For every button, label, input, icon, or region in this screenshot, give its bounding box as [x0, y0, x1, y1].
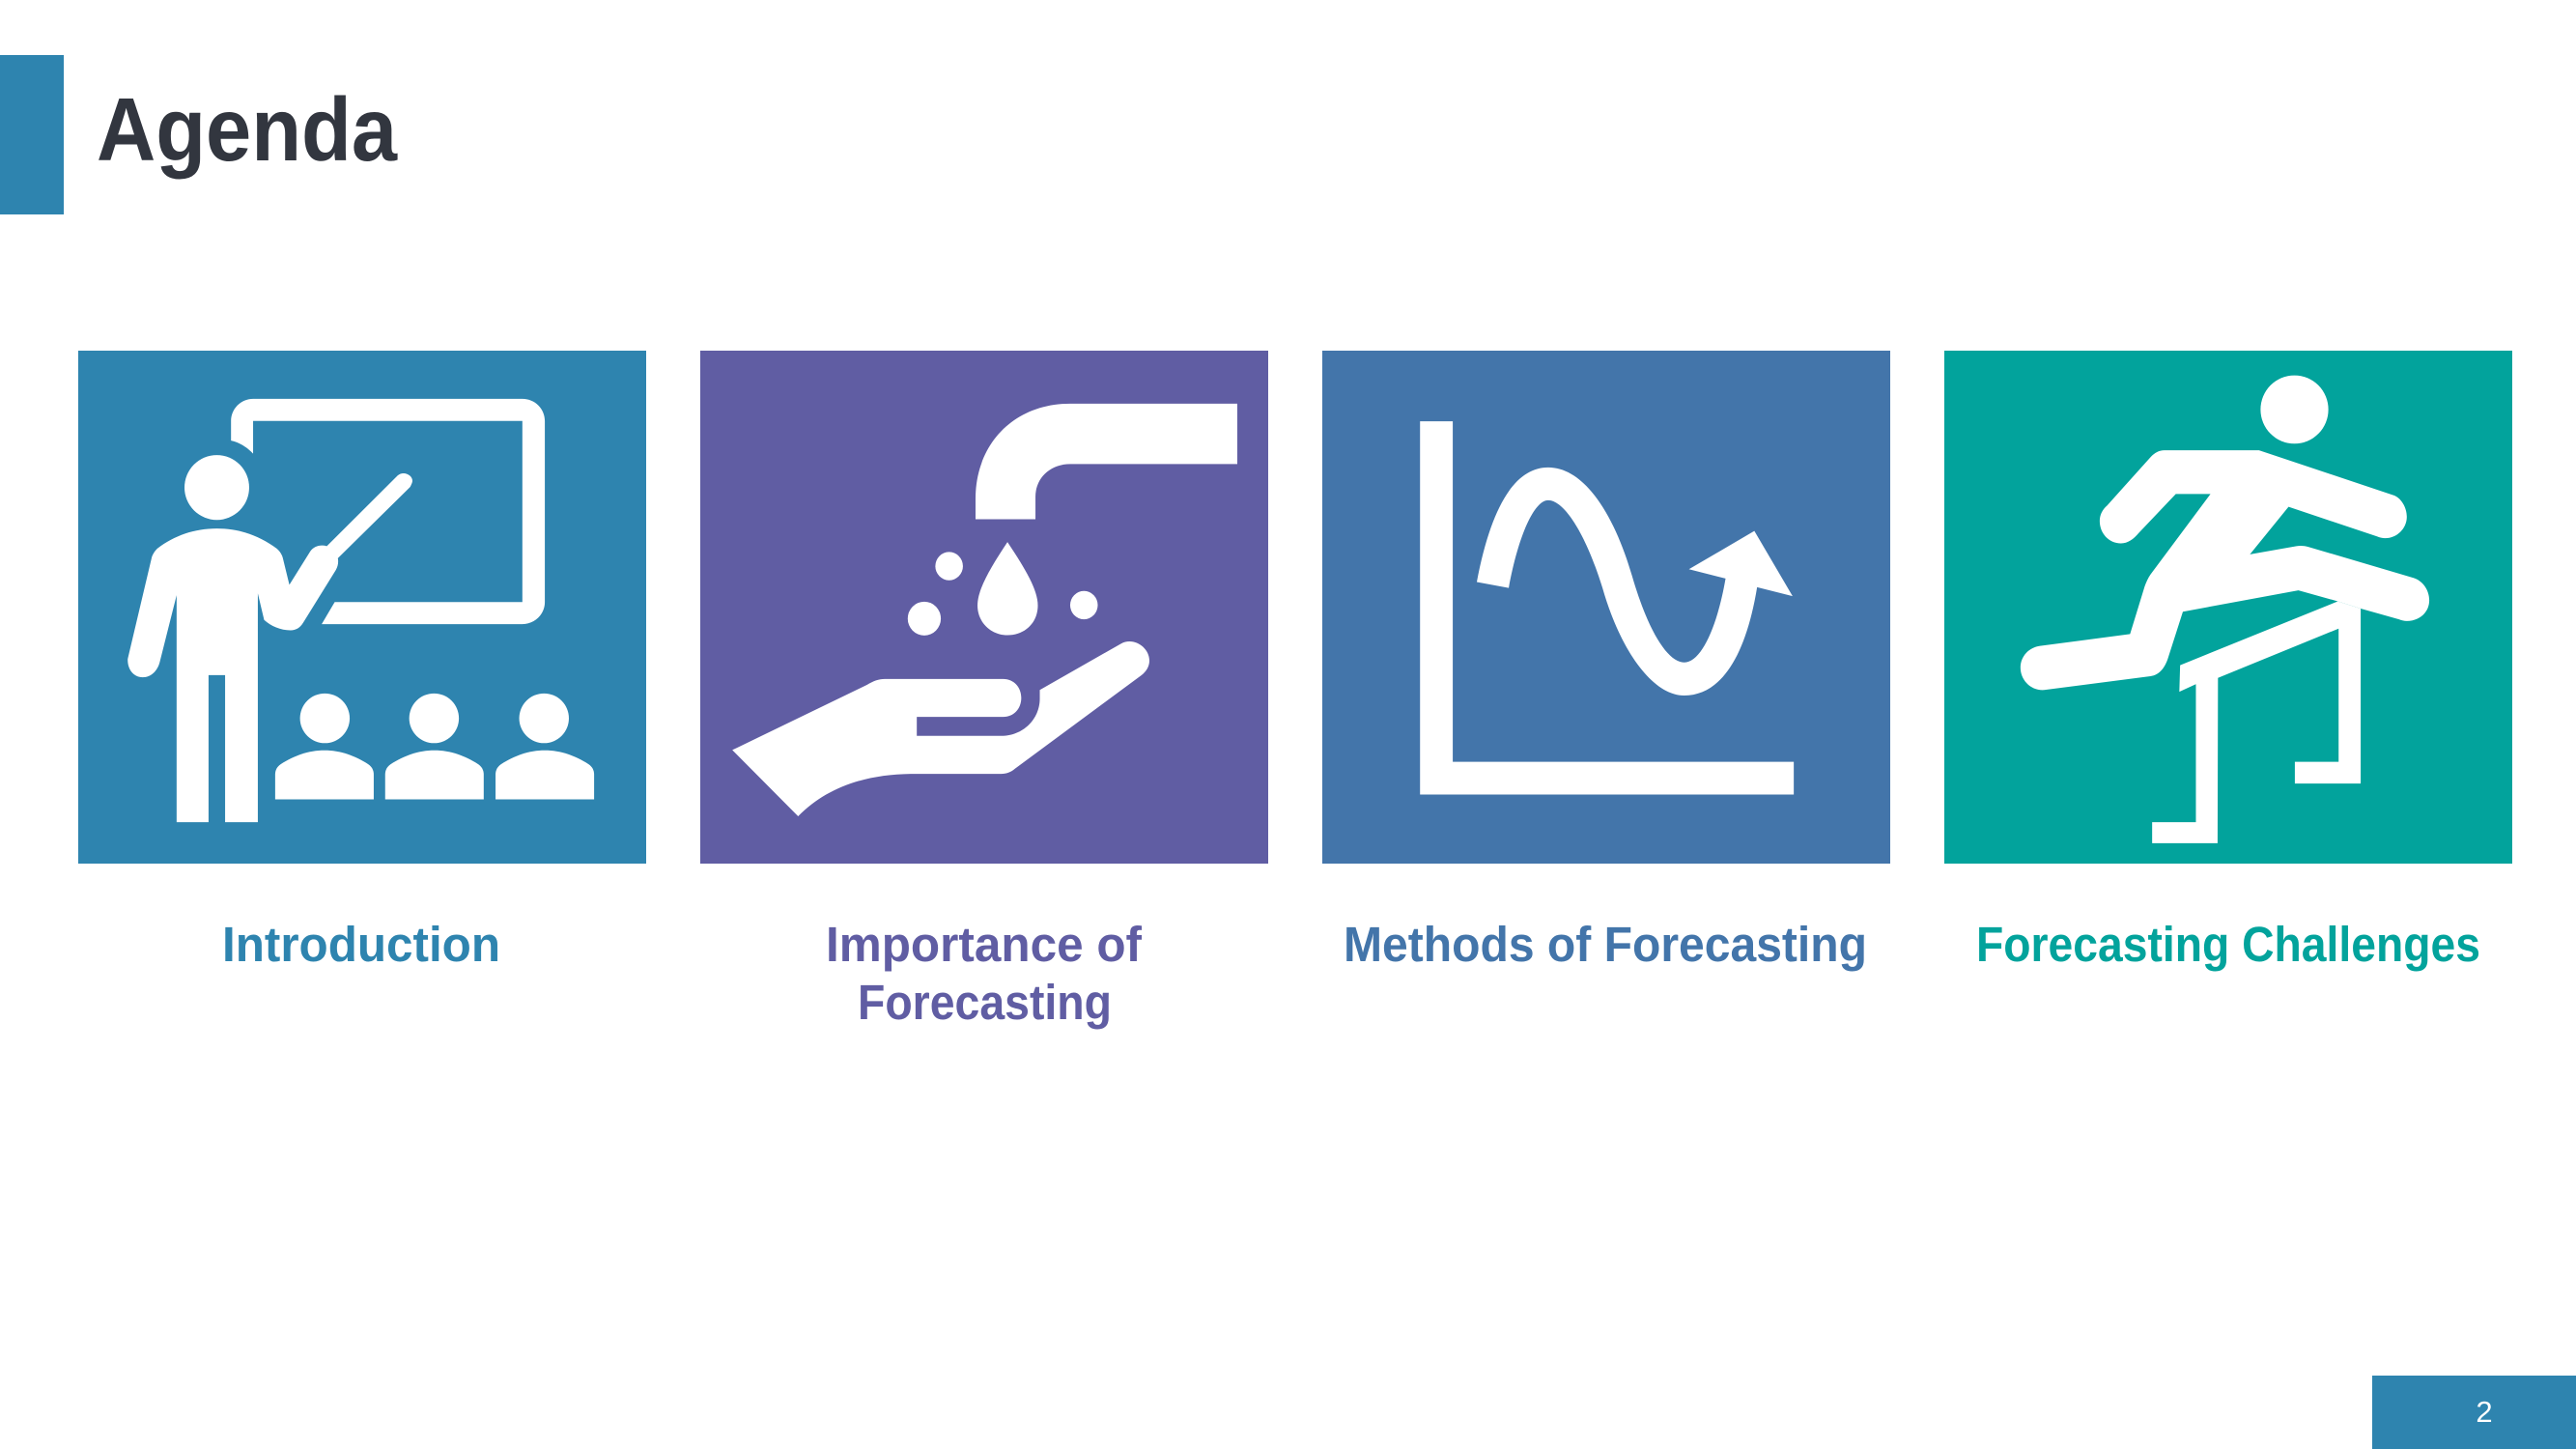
- panel: importance of forecasting: [700, 351, 1268, 1030]
- panel background: challenges: [1944, 351, 2512, 864]
- icon: chart with curved arrow: [1420, 421, 1794, 794]
- page number text: 2: [2476, 1395, 2493, 1429]
- label: forecasting challenges: Forecasting Challenges: [1976, 917, 2480, 972]
- title: Agenda: [97, 79, 398, 180]
- label: importance of forecasting: Importance of: [826, 917, 1143, 972]
- label: importance of forecasting: Forecasting: [858, 975, 1112, 1030]
- label: introduction: Introduction: [222, 917, 500, 972]
- label: importance of forecasting: [826, 917, 1143, 1030]
- icon: teacher with class: [127, 399, 594, 822]
- label: methods of forecasting: Methods of Forecasting: [1344, 917, 1867, 972]
- page number background: [2372, 1376, 2576, 1449]
- title accent bar: [0, 55, 64, 214]
- panel: methods of forecasting: [1322, 351, 1890, 972]
- panel: introduction: [78, 351, 646, 972]
- panel background: introduction: [78, 351, 646, 864]
- icon: tap and hand: [732, 404, 1237, 816]
- panel: forecasting challenges: [1944, 351, 2512, 972]
- panel background: importance: [700, 351, 1268, 864]
- panel background: methods: [1322, 351, 1890, 864]
- page number: [2372, 1376, 2576, 1449]
- icon: hurdler: [2021, 376, 2429, 843]
